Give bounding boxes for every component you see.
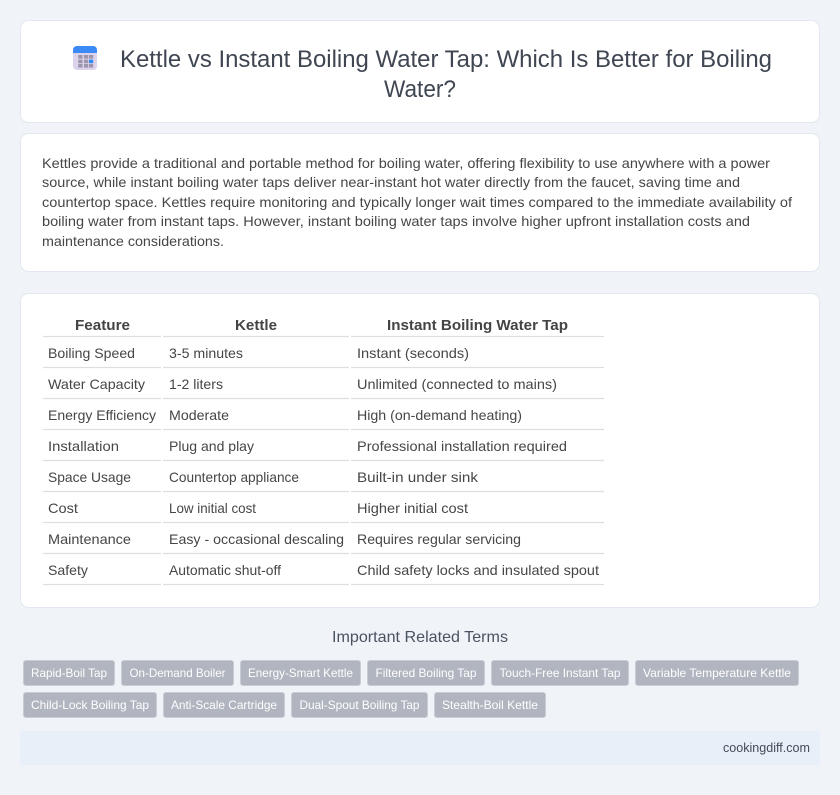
table row: energy efficiency: High (on-demand heating) bbox=[357, 407, 522, 423]
table row: cost: Cost bbox=[48, 500, 78, 516]
tag: touch-free instant tap: Touch-Free Instant Tap bbox=[500, 666, 621, 680]
tag: on-demand boiler bbox=[122, 660, 234, 686]
table row: space usage bbox=[43, 469, 604, 492]
table row: energy efficiency: Moderate bbox=[169, 407, 229, 423]
text block: introduction paragraph: countertop space. Kettles require monitoring and typically longer wait times compared to the immediate availability of bbox=[42, 194, 792, 210]
table header row bbox=[43, 317, 604, 336]
panel: title header bbox=[20, 20, 820, 122]
panel: introduction bbox=[20, 134, 820, 272]
text block: introduction paragraph: source, while instant boiling water taps deliver near-instant hot water directly from the faucet, saving time and bbox=[42, 174, 740, 190]
footer: cookingdiff.com bbox=[723, 741, 810, 755]
tag: dual-spout boiling tap bbox=[292, 692, 428, 718]
tag: energy-smart kettle: Energy-Smart Kettle bbox=[248, 666, 353, 680]
table row: boiling speed: Instant (seconds) bbox=[357, 345, 469, 361]
tag: stealth-boil kettle bbox=[434, 692, 546, 718]
table header row: Feature bbox=[75, 317, 130, 334]
text block: introduction paragraph: maintenance considerations. bbox=[42, 233, 224, 249]
table row: safety: Automatic shut-off bbox=[169, 562, 281, 578]
table row: cost: Low initial cost bbox=[169, 500, 256, 516]
heading: related terms: Important Related Terms bbox=[332, 629, 508, 646]
tag: on-demand boiler: On-Demand Boiler bbox=[130, 666, 226, 680]
table row: energy efficiency bbox=[43, 407, 604, 430]
table row: installation: Plug and play bbox=[169, 438, 254, 454]
table header row: Instant Boiling Water Tap bbox=[387, 317, 568, 334]
table row: safety bbox=[43, 562, 604, 584]
tag: filtered boiling tap: Filtered Boiling Tap bbox=[376, 666, 477, 680]
table row: boiling speed bbox=[43, 345, 604, 368]
table row: installation: Installation bbox=[48, 438, 119, 454]
table header row: Kettle bbox=[235, 317, 277, 334]
table row: maintenance bbox=[43, 531, 604, 554]
table row: cost bbox=[43, 500, 604, 522]
table row: boiling speed: 3-5 minutes bbox=[169, 345, 243, 361]
table row: boiling speed: Boiling Speed bbox=[48, 345, 135, 361]
tag group: related terms bbox=[24, 660, 798, 718]
table row: water capacity bbox=[43, 376, 604, 398]
table row: maintenance: Easy - occasional descaling bbox=[169, 531, 344, 547]
tag: filtered boiling tap bbox=[368, 660, 484, 686]
tag: child-lock boiling tap: Child-Lock Boiling Tap bbox=[31, 698, 149, 712]
title: Water? bbox=[384, 76, 456, 103]
table row: space usage: Countertop appliance bbox=[169, 469, 299, 485]
tag: anti-scale cartridge bbox=[164, 692, 284, 718]
tag: energy-smart kettle bbox=[240, 660, 360, 686]
table row: maintenance: Requires regular servicing bbox=[357, 531, 521, 547]
text block: introduction paragraph: Kettles provide a traditional and portable method for boiling water, offering flexibility to use anywhere with a power bbox=[42, 155, 770, 171]
panel: comparison table bbox=[20, 294, 820, 608]
tag: dual-spout boiling tap: Dual-Spout Boiling Tap bbox=[300, 698, 420, 712]
text block: introduction paragraph: boiling water from instant taps. However, instant boiling water taps involve higher upfront installation costs and bbox=[42, 213, 750, 229]
tag: variable temperature kettle: Variable Temperature Kettle bbox=[643, 666, 791, 680]
table row: energy efficiency: Energy Efficiency bbox=[48, 407, 156, 423]
title bbox=[120, 46, 772, 103]
table row: space usage: Space Usage bbox=[48, 469, 131, 485]
table row: safety: Safety bbox=[48, 562, 88, 578]
table row: installation bbox=[43, 438, 604, 460]
table row: installation: Professional installation required bbox=[357, 438, 567, 454]
table row: safety: Child safety locks and insulated spout bbox=[357, 562, 599, 578]
tag: anti-scale cartridge: Anti-Scale Cartridge bbox=[171, 698, 277, 712]
icon: calendar bbox=[73, 46, 97, 70]
tag: variable temperature kettle bbox=[636, 660, 798, 686]
tag: touch-free instant tap bbox=[492, 660, 628, 686]
table row: water capacity: Unlimited (connected to mains) bbox=[357, 376, 557, 392]
tag: rapid-boil tap bbox=[24, 660, 114, 686]
tag: child-lock boiling tap bbox=[24, 692, 156, 718]
title: Kettle vs Instant Boiling Water Tap: Which Is Better for Boiling bbox=[120, 46, 772, 73]
tag: rapid-boil tap: Rapid-Boil Tap bbox=[31, 666, 107, 680]
table row: space usage: Built-in under sink bbox=[357, 469, 479, 485]
table row: water capacity: 1-2 liters bbox=[169, 376, 223, 392]
table row: cost: Higher initial cost bbox=[357, 500, 468, 516]
tag: stealth-boil kettle: Stealth-Boil Kettle bbox=[442, 698, 538, 712]
footer bbox=[20, 731, 820, 765]
table row: maintenance: Maintenance bbox=[48, 531, 131, 547]
table row: water capacity: Water Capacity bbox=[48, 376, 145, 392]
text block: introduction paragraph bbox=[42, 155, 792, 249]
